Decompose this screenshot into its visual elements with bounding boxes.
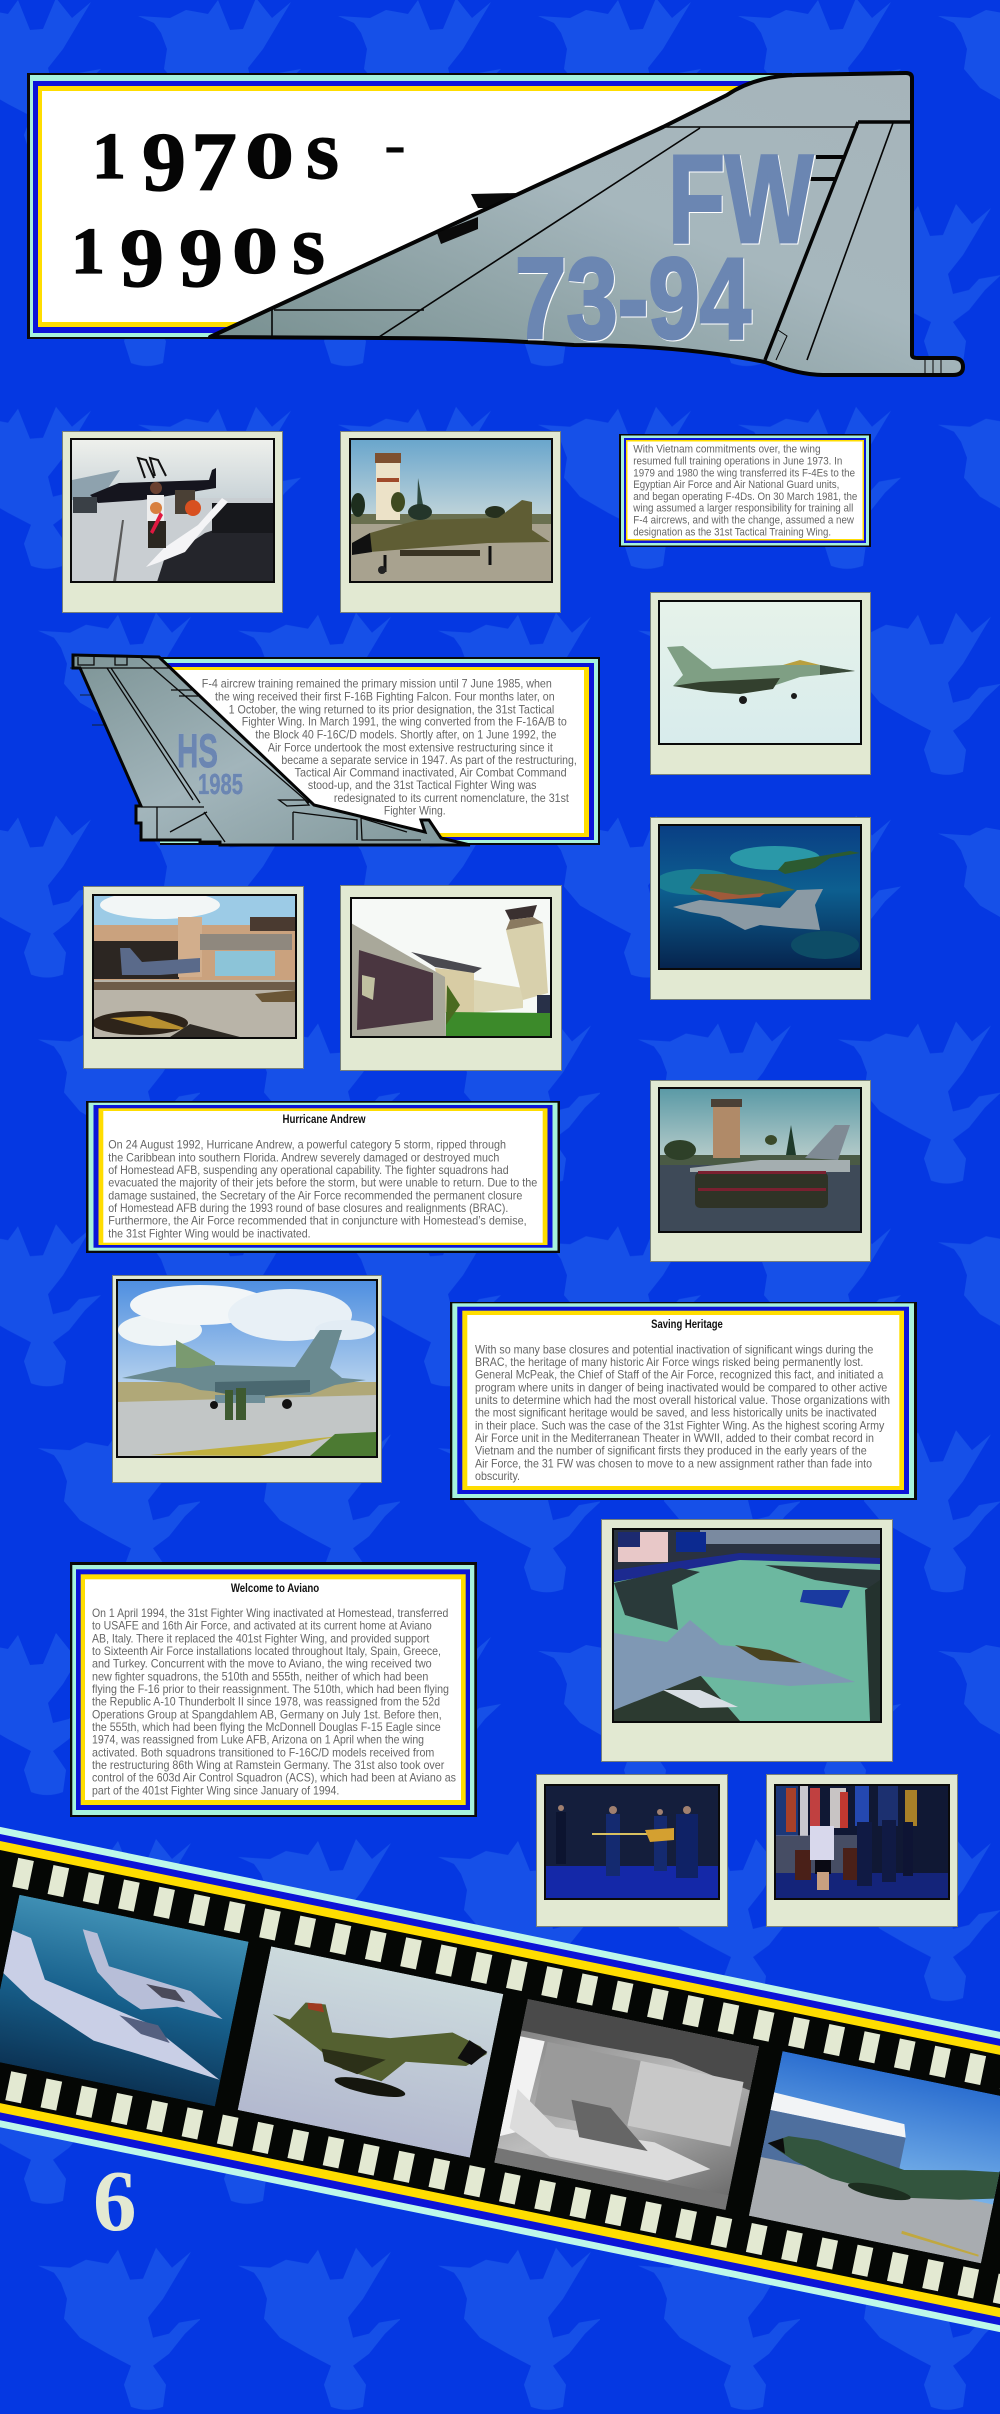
- tail code: FW: FW: [668, 130, 813, 269]
- film frame 3: hangar black and white: [494, 1999, 759, 2210]
- film frame 1: F-16 pair over water: [0, 1894, 248, 2106]
- title: 1970s - 1990s: 9: [120, 212, 164, 305]
- text panel: return to training: Egyptian Air Force and Air National Guard units,: [633, 479, 839, 491]
- photo: F-16 over pale sky: [660, 602, 860, 743]
- heading: Welcome to Aviano: [231, 1582, 319, 1595]
- photo card: flag ceremony: [536, 1774, 728, 1926]
- title: 1970s - 1990s: -: [384, 111, 406, 177]
- body text: in their place. Such was the case of the 31st Fighter Wing. As the highest scoring Army: [475, 1418, 884, 1432]
- sprocket holes: [0, 1830, 1000, 2324]
- title panel with tail graphic: [27, 73, 963, 375]
- body text: the 555th, which had been flying the McDonnell Douglas F-15 Eagle since: [92, 1720, 441, 1734]
- photo card: Homestead AFB sign and tower: [340, 886, 562, 1070]
- body text: new fighter squadrons, the 510th and 555th, neither of which had been: [92, 1669, 428, 1683]
- photo: group portrait: [660, 1089, 860, 1231]
- heading: Saving Heritage: [651, 1318, 723, 1331]
- body text: stood-up, and the 31st Tactical Fighter Wing was: [308, 778, 537, 792]
- title: 1970s - 1990s: s: [306, 103, 339, 197]
- photo: F-4 at tower: [351, 440, 551, 581]
- photo: hangar ceremony: [614, 1530, 880, 1721]
- tail code: 73-94: 73-94: [515, 235, 751, 363]
- title: 1970s - 1990s: 9: [179, 212, 223, 305]
- body text: Operations Group at Spangdahlem AB, Germany on July 1st. Before then,: [92, 1707, 442, 1721]
- photo card: F-4 and control tower: [340, 432, 560, 612]
- body text: Air Force unit in the Mediterranean Theater in WWII, added to their combat record in: [475, 1431, 874, 1445]
- body text: the restructuring 86th Wing at Ramstein Germany. The 31st also took over: [92, 1758, 444, 1772]
- body text: control of the 603d Air Control Squadron (ACS), which had been at Aviano as: [92, 1771, 456, 1785]
- film frame 4: F-4 by hangar: [749, 2051, 1000, 2264]
- text panel: return to training: With Vietnam commitments over, the wing: [633, 444, 821, 456]
- body text: Tactical Air Command inactivated, Air Combat Command: [295, 766, 567, 780]
- text panel: return to training: and began operating F-4Ds. On 30 March 1981, the: [633, 491, 857, 503]
- body text: 1 October, the wing returned to its prior designation, the 31st Tactical: [229, 702, 554, 716]
- photo: island and sea: [660, 826, 860, 968]
- photo card: aerial F-16 over island fort: [650, 818, 870, 1000]
- body text: BRAC, the heritage of many historic Air Force wings risked being permanently lost.: [475, 1355, 863, 1369]
- body text: On 24 August 1992, Hurricane Andrew, a powerful category 5 storm, ripped through: [108, 1138, 506, 1152]
- body text: became a separate service in 1947. As part of the restructuring,: [281, 753, 577, 767]
- photo card: weapons loading on F-4: [62, 432, 282, 612]
- body text: the most significant heritage would be saved, and less historically units be inactivated: [475, 1406, 877, 1420]
- photo card: squadron group with F-16: [650, 1080, 870, 1262]
- body text: and Turkey. Concurrent with the move to Aviano, the wing received two: [92, 1657, 432, 1671]
- body text: part of the 401st Fighter Wing since January of 1994.: [92, 1783, 339, 1797]
- photo card: activation ceremony in hangar: [602, 1520, 892, 1762]
- body text: the Caribbean into southern Florida. Andrew severely damaged or destroyed much: [108, 1150, 499, 1164]
- title frame: [27, 73, 792, 339]
- body text: Furthermore, the Air Force recommended that in conjuncture with Homestead’s demise,: [108, 1214, 527, 1228]
- body text: F-4 aircrew training remained the primary mission until 7 June 1985, when: [202, 677, 552, 691]
- title: 1970s - 1990s: s: [292, 198, 325, 292]
- body text: 1974, was reassigned from Luke AFB, Arizona on 1 April when the wing: [92, 1733, 424, 1747]
- body text: Vietnam and the number of significant firsts they produced in the early years of the: [475, 1444, 867, 1458]
- body text: With so many base closures and potential inactivation of significant wings during the: [475, 1342, 874, 1356]
- photo: F-16 with ground crew: [118, 1281, 376, 1456]
- film frame 2: F-4 in flight: [238, 1946, 504, 2158]
- title: 1970s - 1990s: 7: [191, 116, 237, 209]
- page number 6: 6: [93, 2152, 136, 2249]
- body text: the Republic A-10 Thunderbolt II since 1978, was reassigned from the 52d: [92, 1695, 440, 1709]
- body text: obscurity.: [475, 1469, 520, 1483]
- body text: to Sixteenth Air Force installations located throughout Italy, Spain, Greece,: [92, 1644, 441, 1658]
- body text: Air Force, the 31 FW was chosen to move to a new assignment rather than fade into: [475, 1456, 872, 1470]
- icon: F-16 tail fin: [70, 655, 470, 845]
- icon: aircraft tail fin: [210, 73, 963, 375]
- body text: flying the F-16 prior to their reassignment. The 510th, which had been flying: [92, 1682, 449, 1696]
- text panel with F-16 tail: [70, 655, 600, 845]
- body text: to USAFE and 16th Air Force, and activated at its current home at Aviano: [92, 1619, 432, 1633]
- photo card: hurricane damaged hangar: [84, 886, 304, 1068]
- body text: damage sustained, the Secretary of the Air Force recommended the permanent closure: [108, 1188, 523, 1202]
- body text: General McPeak, the Chief of Staff of the Air Force, recognized this fact, and initiated a: [475, 1368, 884, 1382]
- photo: hangar and debris: [94, 896, 295, 1037]
- text panel: return to training: wing assumed a larger responsibility for training all: [632, 503, 853, 515]
- text panel: Hurricane Andrew: [86, 1101, 560, 1253]
- photo card: F-16 on the ramp: [112, 1276, 382, 1482]
- text panel: return to training: designation as the 31st Tactical Training Wing.: [633, 526, 831, 538]
- body text: activated. Both squadrons transitioned to F-16C/D models received from: [92, 1745, 434, 1759]
- body text: the 31st Fighter Wing would be inactivated.: [108, 1226, 311, 1240]
- body text: of Homestead AFB, suspending any operational capability. The fighter squadrons had: [108, 1163, 509, 1177]
- body text: AB, Italy. There it replaced the 401st Fighter Wing, and provided support: [92, 1632, 430, 1646]
- body text: of Homestead AFB during the 1993 round of base closures and realignments (BRAC).: [108, 1201, 508, 1215]
- text panel: return to training: 1979 and 1980 the wing transferred its F-4Es to the: [633, 467, 855, 479]
- text panel: Saving Heritage: [450, 1302, 917, 1500]
- title: 1970s - 1990s: 9: [142, 116, 186, 209]
- photo: flags and officials: [776, 1786, 948, 1898]
- photo: crew with missile: [72, 440, 273, 581]
- body text: units to determine which had the most overall historical value. Those organizations with: [475, 1393, 890, 1407]
- body text: Fighter Wing. In March 1991, the wing converted from the F-16A/B to: [242, 715, 567, 729]
- title: 1970s - 1990s: 0: [245, 120, 294, 193]
- title: 1970s - 1990s: 1: [71, 215, 105, 288]
- body text: program where units in danger of being inactivated would be compared to other active: [475, 1380, 888, 1394]
- title: 1970s - 1990s: 0: [232, 215, 278, 288]
- body text: the wing received their first F-16B Fighting Falcon. Four months later, on: [215, 690, 555, 704]
- heading: Hurricane Andrew: [282, 1113, 366, 1126]
- body text: the Block 40 F-16C/D models. Shortly after, on 1 June 1992, the: [255, 728, 557, 742]
- text panel: return to training: resumed full training operations in June 1973. In: [633, 455, 842, 467]
- body text: Air Force undertook the most extensive restructuring since it: [268, 740, 554, 754]
- tail code: 1985: 1985: [198, 769, 243, 801]
- text panel: Welcome to Aviano: [70, 1562, 477, 1817]
- filmstrip: [0, 1808, 1000, 2347]
- photo: sign: [352, 899, 550, 1036]
- body text: Fighter Wing.: [384, 804, 446, 818]
- body text: evacuated the majority of their jets before the storm, but were unable to return. Due to the: [108, 1176, 538, 1190]
- text panel: return to training: F-4 aircrews, and with the change, assumed a new: [633, 514, 855, 526]
- text panel: return to training: [619, 434, 871, 547]
- frame: [160, 657, 600, 845]
- photo card: F-16 in flight: [650, 592, 870, 774]
- body text: On 1 April 1994, the 31st Fighter Wing inactivated at Homestead, transferred: [92, 1606, 448, 1620]
- photo card: dignitaries with flags: [766, 1774, 958, 1926]
- title: 1970s - 1990s: 1: [92, 120, 126, 193]
- body text: redesignated to its current nomenclature, the 31st: [334, 791, 570, 805]
- photo: guidon passing: [546, 1786, 718, 1898]
- tail code: HS: HS: [177, 724, 218, 777]
